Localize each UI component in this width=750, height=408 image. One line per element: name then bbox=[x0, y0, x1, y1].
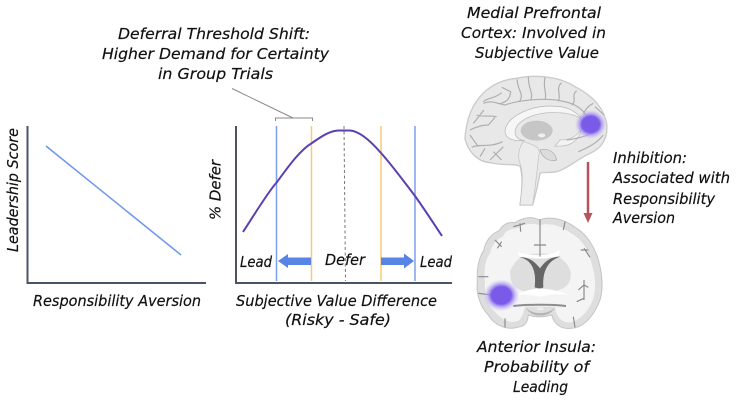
middle chart x label bbox=[236, 292, 437, 329]
left chart y label: Leadership Score bbox=[4, 128, 22, 252]
left arrow bbox=[278, 254, 311, 268]
text: inhibition note bbox=[612, 149, 730, 227]
heading: medial prefrontal cortex: Subjective Value bbox=[475, 44, 599, 62]
text: inhibition note: Inhibition: bbox=[613, 149, 687, 167]
title: deferral threshold shift bbox=[102, 25, 330, 83]
defer curve bbox=[243, 130, 442, 236]
middle chart x label: Subjective Value Difference bbox=[236, 292, 437, 310]
arrow: inhibition bbox=[584, 162, 592, 223]
left chart x label: Responsibility Aversion bbox=[33, 292, 201, 310]
heading: anterior insula: Leading bbox=[513, 378, 568, 396]
title: deferral threshold shift: in Group Trials bbox=[158, 65, 273, 83]
icon: coronal brain bbox=[477, 218, 602, 328]
text: inhibition note: Associated with bbox=[612, 169, 730, 187]
title: deferral threshold shift: Deferral Threshold Shift: bbox=[118, 25, 310, 43]
middle chart axes bbox=[236, 126, 452, 283]
right arrow bbox=[381, 254, 414, 268]
icon: sagittal brain bbox=[465, 76, 607, 205]
defer label: Defer bbox=[325, 251, 367, 269]
left chart trend line bbox=[46, 146, 181, 255]
text: inhibition note: Aversion bbox=[612, 209, 675, 227]
heading: anterior insula: Anterior Insula: bbox=[476, 338, 596, 356]
middle chart y label: % Defer bbox=[206, 158, 224, 220]
middle chart x label: (Risky - Safe) bbox=[285, 311, 391, 329]
left chart: leadership score vs responsibility aversion bbox=[4, 126, 206, 310]
middle chart: percent defer curve bbox=[206, 126, 452, 329]
callout bracket bbox=[232, 88, 312, 121]
heading: anterior insula: Probability of bbox=[484, 358, 592, 376]
text: inhibition note: Responsibility bbox=[613, 190, 716, 208]
callosum band bbox=[505, 106, 582, 141]
heading: medial prefrontal cortex bbox=[461, 4, 606, 62]
heading: medial prefrontal cortex: Cortex: Involved in bbox=[461, 24, 606, 42]
lead label right: Lead bbox=[420, 253, 452, 271]
left chart axes bbox=[28, 126, 206, 283]
heading: anterior insula bbox=[476, 338, 596, 396]
threshold lines bbox=[276, 126, 415, 281]
title: deferral threshold shift: Higher Demand for Certainty bbox=[102, 45, 330, 63]
lead label left: Lead bbox=[240, 253, 272, 271]
heading: medial prefrontal cortex: Medial Prefrontal bbox=[467, 4, 602, 22]
